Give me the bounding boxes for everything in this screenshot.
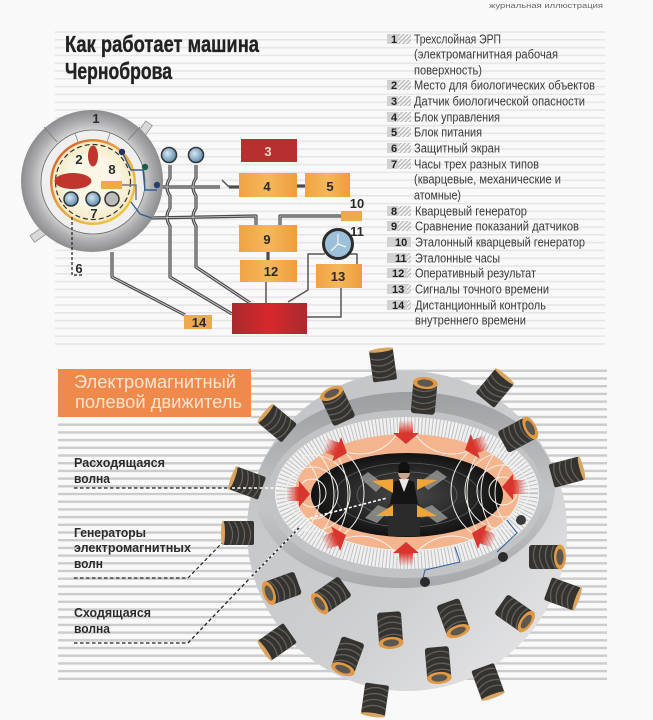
legend number tags: 11 [395,253,407,265]
label: wave generators: электромагнитных [74,540,192,555]
legend [387,32,595,328]
legend text: (электромагнитная рабочая [414,48,558,62]
biological objects [54,146,98,189]
legend text: Блок управления [414,110,500,124]
legend text: Защитный экран [414,142,500,156]
label: converging wave: Сходящаяся [74,605,151,620]
legend text: Кварцевый генератор [415,204,527,218]
legend text: Эталонный кварцевый генератор [415,236,585,250]
legend text [414,32,595,328]
blue wires and sockets [420,515,526,587]
lower stripes beside banner [251,369,607,419]
cross-section numbers: 7 [90,206,98,221]
legend text: Сравнение показаний датчиков [415,220,579,234]
legend text: (кварцевые, механические и [414,172,561,186]
cross-section numbers [75,111,116,276]
block 5 [305,173,350,197]
wiring diagram lines [112,165,357,317]
legend number tags: 14 [392,300,405,312]
sensor dots [119,149,160,188]
inner chamber [50,139,136,225]
legend number tags: 10 [395,237,407,249]
panel: field engine sphere [221,348,586,718]
cross-section numbers: 2 [75,152,83,167]
salmon ring [295,434,519,550]
legend number tags: 6 [391,143,397,155]
heading banner [58,369,251,417]
legend text: Трехслойная ЭРП [414,32,501,46]
sphere body [247,371,567,691]
dashed shield leader [72,217,84,275]
legend text: Блок питания [414,126,482,140]
title: Черноброва [65,58,172,84]
label: diverging wave: Расходящаяся [74,455,165,470]
heading banner: Электромагнитный [74,372,236,392]
label: converging wave [74,498,387,643]
legend number tags: 4 [391,112,398,124]
orange arrows [372,479,437,517]
legend number tags: 2 [391,80,397,92]
panel: machine cross-section [21,110,163,276]
field wave arcs [286,425,530,561]
legend number tags: 9 [391,221,397,233]
icon: reference clock 11: 11 [350,224,364,239]
block 4 [239,173,297,197]
label: diverging wave [74,455,283,488]
label: diverging wave: волна [74,471,111,486]
block 13: 13 [331,269,345,284]
legend number tags: 13 [392,284,404,296]
outer ring [21,110,163,252]
legend number tags: 5 [391,127,397,139]
label: wave generators: волн [74,556,103,571]
title: Как работает машина [65,31,259,57]
legend text: Дистанционный контроль [415,298,546,312]
upper striped background [55,30,605,346]
block 10 [341,196,364,221]
heading banner: полевой движитель [75,392,242,412]
icon: outer gauges [162,148,204,162]
block 13 [316,264,362,288]
label: wave generators [74,525,222,578]
generators [221,346,587,719]
legend text: Оперативный результат [415,266,536,280]
central figure [388,462,420,536]
title [65,31,259,84]
label: wave generators: Генераторы [74,525,146,540]
red arrows [286,420,526,566]
orange arrow shafts [360,470,448,523]
legend number tags [387,34,411,312]
block 12 [240,260,297,282]
block 12: 12 [264,264,278,279]
legend text: Сигналы точного времени [415,282,549,296]
large red block [232,303,307,334]
lower striped background [58,419,607,681]
block 4: 4 [263,179,271,194]
icon: reference clock 11 [324,224,364,258]
legend text: Место для биологических объектов [414,78,595,92]
quartz generator [101,181,122,189]
legend number tags: 3 [391,96,397,108]
block 5: 5 [326,179,334,194]
block 9: 9 [263,232,271,247]
cross-section numbers: 1 [92,111,100,126]
cross-section numbers: 8 [108,162,116,177]
legend text: Эталонные часы [415,252,500,266]
legend text: Датчик биологической опасности [414,94,585,108]
block 3 [241,139,297,162]
legend text: поверхность) [414,64,482,78]
label: converging wave: волна [74,621,111,636]
legend text: Часы трех разных типов [414,158,539,172]
block 3: 3 [264,144,272,159]
blue and grey connections [122,152,157,218]
legend number tags: 1 [391,34,397,46]
clocks [64,192,119,206]
legend number tags: 7 [391,159,397,171]
legend text: внутреннего времени [415,314,526,328]
bristle ring [275,417,539,569]
block 10: 10 [350,196,364,211]
credit line: журнальная иллюстрация [489,3,603,10]
cross-section numbers: 6 [75,261,83,276]
block 14: 14 [192,315,207,330]
legend number tags: 8 [391,206,397,218]
block 14 [184,315,212,330]
block 9 [239,225,297,252]
legend number tags: 12 [392,268,404,280]
legend text: атомные) [414,188,461,202]
icon: mounting tabs [30,121,152,242]
recess [252,387,558,593]
black chamber [311,453,503,537]
